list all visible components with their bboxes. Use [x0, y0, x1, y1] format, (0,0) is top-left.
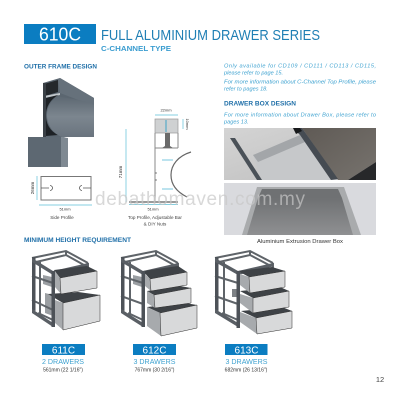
availability note: refer to pages 18. [224, 86, 268, 92]
top profile diagram [118, 108, 191, 212]
top profile diagram: 10mm [185, 118, 190, 130]
model label: 611C [42, 344, 85, 374]
model label: 611C: 2 DRAWERS [42, 357, 84, 366]
header badge: 610C: 610C [39, 24, 81, 44]
top profile caption: & DIY Nuts [144, 221, 167, 226]
drawer box note: pages 13. [223, 120, 249, 126]
cabinet illustration: 612C [121, 251, 197, 336]
availability note: please refer to page 15. [223, 70, 283, 76]
top profile diagram: 22mm [160, 108, 172, 112]
cabinet illustration: 613C [215, 251, 292, 334]
side profile diagram [30, 176, 92, 212]
top profile diagram: 51mm [147, 206, 159, 212]
model label: 611C: 561mm (22 1/16") [43, 368, 83, 374]
top profile caption: Top Profile, Adjustable Bar [128, 215, 182, 220]
photo: aluminium drawer interior [224, 183, 376, 235]
photo caption: Aluminium Extrusion Drawer Box [257, 239, 344, 245]
model label: 613C: 613C [235, 346, 258, 356]
subtitle: C-CHANNEL TYPE [101, 44, 171, 53]
header badge: 610C [24, 24, 96, 44]
heading: minimum height requirement: MINIMUM HEIGHT REQUIREMENT [24, 237, 131, 244]
title: FULL ALUMINIUM DRAWER SERIES [101, 27, 320, 44]
watermark: debathomaven.com.my [95, 189, 306, 210]
availability note: Only available for CD109 / CD111 / CD113 / CD115, [224, 64, 376, 70]
model label: 613C: 682mm (26 13/16") [225, 368, 268, 374]
drawer box note: For more information about Drawer Box, please refer to [224, 112, 376, 118]
model label: 613C [225, 344, 268, 374]
top profile diagram: 71mm [118, 166, 123, 178]
side profile diagram: 51mm [59, 206, 71, 212]
availability note [223, 64, 376, 92]
page number: 12 [376, 375, 384, 384]
photo: drawer box on stone [224, 128, 376, 180]
model label: 612C: 767mm (30 2/16") [135, 368, 175, 374]
3D profile illustration [28, 78, 94, 167]
model label: 612C: 3 DRAWERS [134, 357, 176, 366]
drawer box note [223, 112, 376, 126]
availability note: For more information about C-Channel Top Profile, please [224, 80, 376, 86]
model label: 612C: 612C [143, 346, 166, 356]
model label: 612C [133, 344, 176, 374]
heading: drawer box design: DRAWER BOX DESIGN [224, 100, 296, 108]
side profile caption: Side Profile [50, 215, 74, 220]
cabinet illustration: 611C [32, 251, 100, 330]
side profile diagram: 26mm [30, 182, 35, 194]
model label: 613C: 3 DRAWERS [226, 357, 268, 366]
heading: outer frame design: OUTER FRAME DESIGN [24, 64, 97, 70]
model label: 611C: 611C [52, 346, 75, 356]
